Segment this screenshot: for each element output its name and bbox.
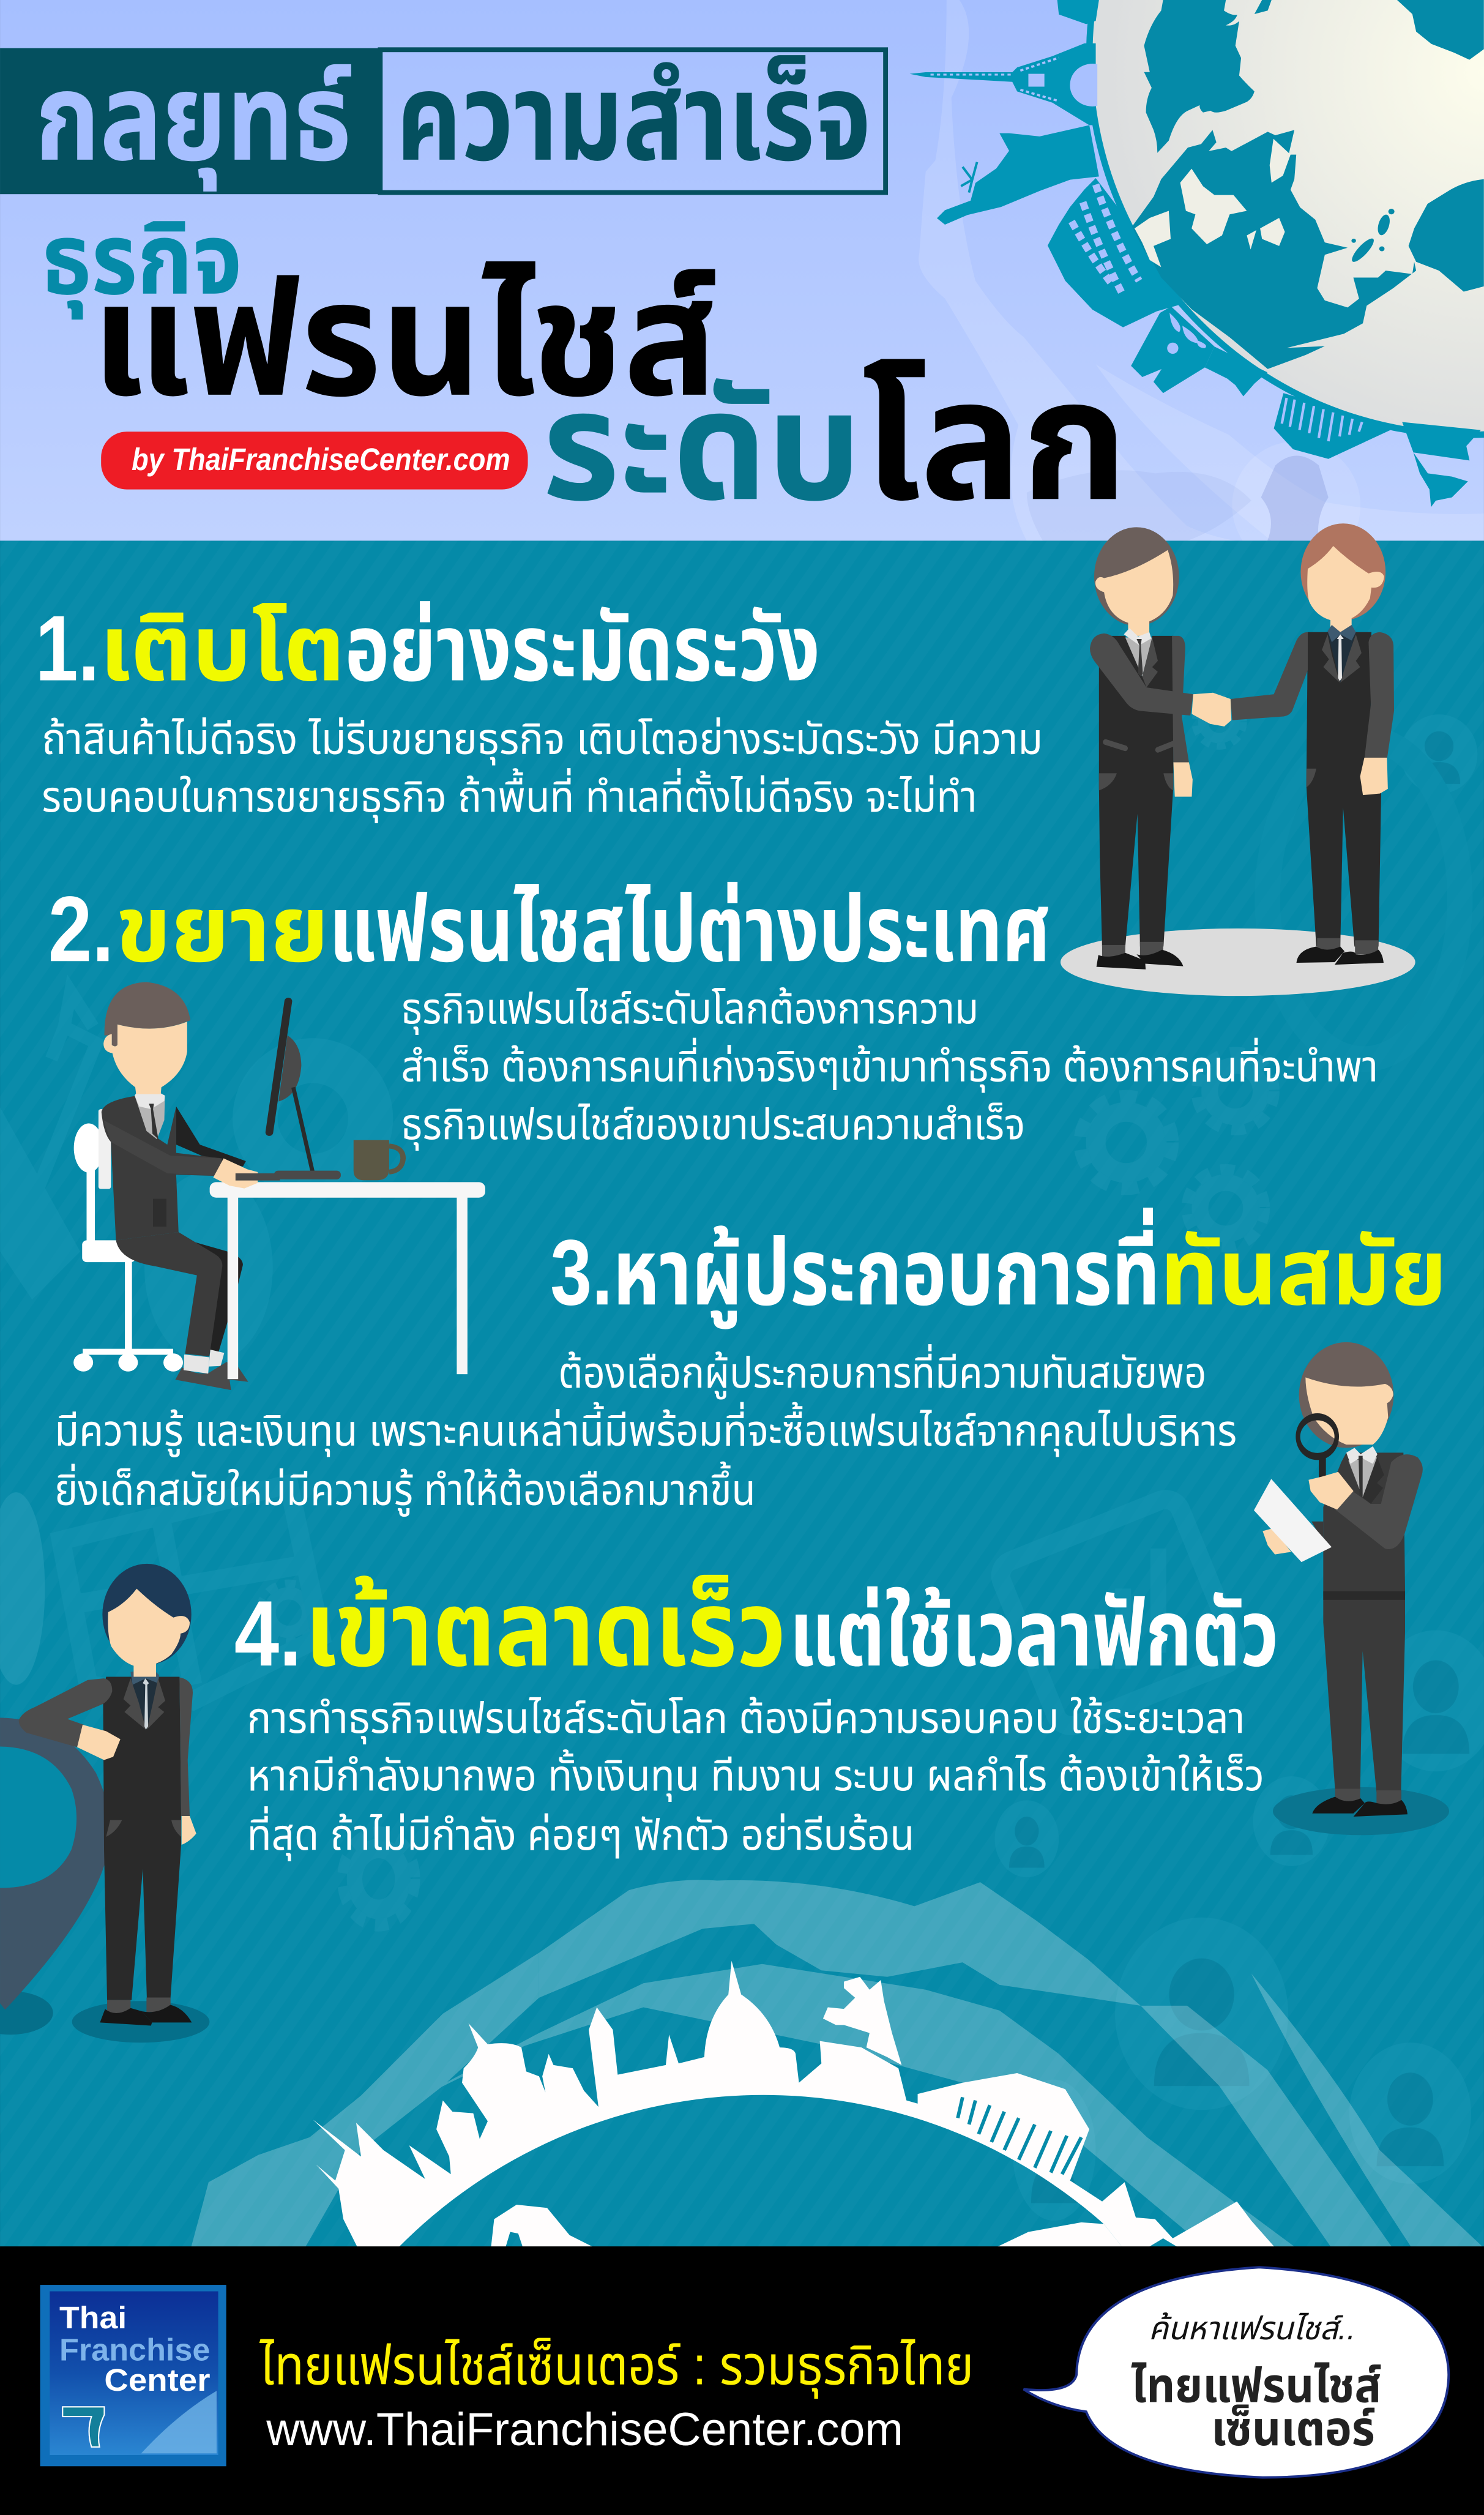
section 4 heading: 4. bbox=[234, 1582, 302, 1686]
section 4 text: หากมีกำลังมากพอ ทั้งเงินทุน ทีมงาน ระบบ ผลกำไร ต้องเข้าให้เร็ว bbox=[247, 1749, 1264, 1803]
section 1 heading bbox=[35, 597, 820, 701]
map pin bbox=[0, 1717, 110, 2009]
left man bbox=[1090, 527, 1193, 970]
section 1 heading: 1. bbox=[35, 597, 100, 701]
subtitle: franchise: แฟรนไชส์ bbox=[91, 250, 717, 429]
section 2 text: ธุรกิจแฟรนไชส์ของเขาประสบความสำเร็จ bbox=[401, 1100, 1025, 1151]
capitol colonnade bbox=[1274, 393, 1397, 459]
logo text: Thai bbox=[59, 2300, 127, 2335]
right lower landmark bbox=[994, 2222, 1123, 2248]
faint background icons: gears, avatars, charts bbox=[0, 698, 1484, 2221]
section 1 bbox=[35, 597, 1043, 823]
cathedral bbox=[1131, 307, 1267, 397]
section 1 text: รอบคอบในการขยายธุรกิจ ถ้าพื้นที่ ทำเลที่ตั้งไม่ดีจริง จะไม่ทำ bbox=[42, 768, 977, 823]
section 3 text: มีความรู้ และเงินทุน เพราะคนเหล่านี้มีพร้อมที่จะซื้อแฟรนไชส์จากคุณไปบริหาร bbox=[54, 1402, 1237, 1457]
section 4 heading: แต่ใช้เวลาฟักตัว bbox=[789, 1582, 1278, 1686]
city skyline silhouette bbox=[313, 1961, 1275, 2248]
title text right: ความสำเร็จ bbox=[397, 50, 871, 186]
title banner bbox=[0, 48, 886, 194]
magnifier bbox=[1298, 1417, 1337, 1480]
planet ribbons bbox=[191, 1880, 1484, 2248]
hands on keyboard bbox=[213, 1158, 280, 1189]
continents bbox=[1131, 0, 1484, 369]
header faint people silhouettes bbox=[1027, 441, 1360, 570]
floor shadows bbox=[0, 1991, 209, 2042]
lower-right landmarks bbox=[1402, 422, 1481, 507]
speech bubble: ไทยแฟรนไชส์ bbox=[1131, 2358, 1381, 2412]
section 2 text bbox=[401, 985, 1378, 1151]
logo wedge bbox=[141, 2391, 217, 2453]
footer logo bbox=[40, 2285, 226, 2466]
chair bbox=[73, 1109, 183, 1372]
byline pill: by ThaiFranchiseCenter.com bbox=[132, 442, 510, 477]
section 4 text bbox=[247, 1694, 1264, 1862]
section 3 heading: 3.หาผู้ประกอบการที่ bbox=[550, 1208, 1160, 1329]
seated man at desk bbox=[73, 982, 485, 1390]
temple columns bbox=[958, 2097, 1081, 2174]
arms and hands bbox=[19, 1678, 196, 1845]
skyline arc bbox=[313, 1961, 1275, 2248]
globe sphere bbox=[1092, 0, 1484, 432]
head bbox=[1299, 1342, 1393, 1448]
speech bubble: เซ็นเตอร์ bbox=[1211, 2402, 1375, 2456]
hand holding paper bbox=[1262, 1527, 1291, 1555]
speech bubble: ค้นหาแฟรนไชส์.. bbox=[1149, 2311, 1355, 2347]
computer bbox=[269, 1001, 341, 1179]
section 1 heading: เติบโต bbox=[100, 597, 345, 701]
section 2 heading: แฟรนไชสไปต่างประเทศ bbox=[329, 877, 1051, 981]
footer url: www.ThaiFranchiseCenter.com bbox=[266, 2404, 903, 2456]
logo text bbox=[59, 2300, 211, 2397]
clasped hands bbox=[1191, 693, 1231, 727]
body background texture bbox=[0, 540, 1484, 2248]
section 4 text: ที่สุด ถ้าไม่มีกำลัง ค่อยๆ ฟักตัว อย่ารีบร้อน bbox=[247, 1806, 914, 1862]
globe rim bbox=[1086, 0, 1484, 438]
section 1 heading: อย่างระมัดระวัง bbox=[345, 597, 820, 701]
section 3 heading: ทันสมัย bbox=[1160, 1220, 1447, 1325]
section 2 heading: ขยาย bbox=[116, 877, 329, 981]
section 4 heading: เข้าตลาดเร็ว bbox=[305, 1569, 786, 1688]
body teal background bbox=[0, 540, 1484, 2248]
man bbox=[102, 982, 248, 1390]
section 4 heading bbox=[234, 1569, 1278, 1688]
logo arrow bbox=[62, 2407, 104, 2447]
subtitle bbox=[42, 204, 1128, 535]
logo text: Center bbox=[104, 2363, 211, 2397]
section 3 text: ต้องเลือกผู้ประกอบการที่มีความทันสมัยพอ bbox=[558, 1344, 1206, 1400]
floor ellipse bbox=[1061, 929, 1415, 996]
section 1 text bbox=[42, 715, 1043, 823]
section 2 heading bbox=[48, 877, 1051, 981]
mug bbox=[354, 1140, 403, 1180]
section 3 text: ยิ่งเด็กสมัยใหม่มีความรู้ ทำให้ต้องเลือกมากขึ้น bbox=[54, 1461, 756, 1517]
subtitle: level: ระดับ bbox=[542, 361, 862, 531]
arm and hand bbox=[1308, 1454, 1423, 1549]
section 2 text: สำเร็จ ต้องการคนที่เก่งจริงๆเข้ามาทำธุรกิจ ต้องการคนที่จะนำพา bbox=[401, 1037, 1378, 1093]
title text left: กลยุทธ์ bbox=[35, 50, 351, 192]
lower landmark bbox=[491, 2205, 595, 2248]
footer yellow line: ไทยแฟรนไชส์เซ็นเตอร์ : รวมธุรกิจไทย bbox=[259, 2335, 974, 2399]
paper bbox=[1254, 1479, 1332, 1562]
banner outline bbox=[380, 50, 886, 193]
section 1 text: ถ้าสินค้าไม่ดีจริง ไม่รีบขยายธุรกิจ เติบโตอย่างระมัดระวัง มีความ bbox=[42, 715, 1043, 766]
man with map pin bbox=[0, 1564, 209, 2042]
collar and tie bbox=[124, 1671, 165, 1730]
man with magnifier bbox=[1254, 1342, 1449, 1835]
footer background bbox=[0, 2246, 1484, 2515]
section 3 text bbox=[54, 1344, 1237, 1517]
floor shadow bbox=[1273, 1787, 1449, 1835]
subtitle: world: โลก bbox=[862, 347, 1128, 535]
speech bubble bbox=[1024, 2267, 1449, 2478]
desk bbox=[210, 1182, 485, 1379]
suit bbox=[1311, 1452, 1408, 1817]
statue of liberty bbox=[937, 125, 1099, 225]
right man bbox=[1231, 523, 1394, 965]
header background bbox=[0, 0, 1484, 540]
subtitle: business: ธุรกิจ bbox=[42, 204, 242, 320]
inner seas bbox=[1135, 139, 1291, 267]
equestrian statue bbox=[823, 1977, 901, 2065]
logo text: Franchise bbox=[59, 2332, 210, 2367]
banner dark block bbox=[0, 48, 380, 194]
suit bbox=[100, 1676, 192, 2026]
section 4 text: การทำธุรกิจแฟรนไชส์ระดับโลก ต้องมีความรอบคอบ ใช้ระยะเวลา bbox=[247, 1694, 1245, 1744]
colosseum bbox=[1048, 178, 1179, 327]
collar and tie bbox=[1346, 1446, 1384, 1504]
section 2 text: ธุรกิจแฟรนไชส์ระดับโลกต้องการความ bbox=[401, 985, 979, 1036]
section 2 heading: 2. bbox=[48, 877, 114, 981]
eiffel tower bbox=[909, 0, 1099, 125]
header background ribbons bbox=[919, 0, 1484, 550]
byline pill bbox=[101, 432, 528, 490]
head bbox=[102, 1564, 192, 1676]
globe bbox=[909, 0, 1484, 507]
handshake figures bbox=[1061, 523, 1415, 996]
